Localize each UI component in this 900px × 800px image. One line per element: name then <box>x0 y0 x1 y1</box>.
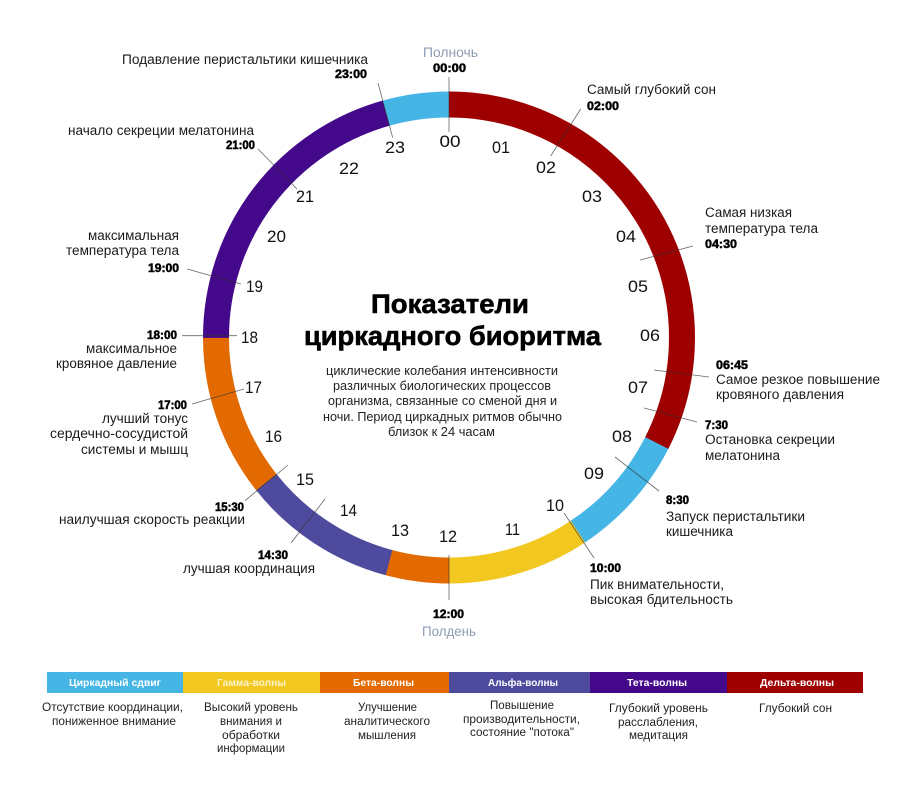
callout: noon: 12:00 <box>433 609 464 621</box>
callout: 23:00 <box>122 52 393 138</box>
legend: beta waves: мышления <box>358 730 416 742</box>
hour numbers: 08 <box>612 427 632 446</box>
legend: gamma waves: внимания и <box>220 716 282 728</box>
legend: theta waves: Тета-волны <box>627 677 687 689</box>
callout: 21:00 <box>68 123 297 189</box>
callout: 04:30: температура тела <box>705 221 818 236</box>
callout: 7:30: 7:30 <box>705 420 728 432</box>
hour numbers: 15 <box>296 470 314 489</box>
callout: 18:00: 18:00 <box>147 330 177 342</box>
callout: 18:00: кровяное давление <box>56 356 177 371</box>
callout: 8:30: Запуск перистальтики <box>666 509 805 524</box>
callout: midnight: Полночь <box>423 45 478 60</box>
callout: midnight: 00:00 <box>433 63 466 75</box>
callout: 19:00 <box>66 228 241 284</box>
hour numbers: 18 <box>241 328 258 347</box>
callout: 02:00: 02:00 <box>587 101 619 113</box>
callout: 10:00 <box>564 513 733 607</box>
hour numbers: 05 <box>628 277 648 296</box>
callout: 04:30: Самая низкая <box>705 205 792 220</box>
callout: 17:00: лучший тонус <box>102 411 188 426</box>
description text <box>323 364 562 439</box>
legend: alpha waves: Повышение <box>490 700 554 712</box>
hour numbers: 10 <box>546 496 564 515</box>
ring: 24-hour biorhythm circle <box>122 10 776 665</box>
legend: delta waves <box>727 672 863 715</box>
legend: alpha waves <box>449 672 590 739</box>
callout: 10:00: высокая бдительность <box>590 592 733 607</box>
description text: организма, связанные со сменой дня и <box>328 394 557 408</box>
callout: 04:30: 04:30 <box>705 239 737 251</box>
legend: beta waves: аналитического <box>344 716 430 728</box>
legend: delta waves: Дельта-волны <box>760 677 834 689</box>
callout: 06:45: кровяного давления <box>716 387 844 402</box>
hour numbers: 06 <box>640 326 660 345</box>
legend: gamma waves: информации <box>217 743 285 755</box>
hour numbers: 12 <box>439 527 457 546</box>
hour numbers: 11 <box>505 520 520 539</box>
callout: 17:00 <box>50 389 244 457</box>
title: циркадного биоритма <box>304 321 602 351</box>
legend: theta waves <box>590 672 727 742</box>
hour numbers: 19 <box>246 277 263 296</box>
hour numbers: 23 <box>385 138 405 157</box>
callout: 15:30 <box>59 465 288 527</box>
legend: gamma waves: Высокий уровень <box>204 702 298 714</box>
hour numbers: 00 <box>440 132 460 151</box>
legend: gamma waves: Гамма-волны <box>217 677 286 689</box>
callout: 7:30 <box>644 408 835 463</box>
callout: 23:00: 23:00 <box>335 69 367 81</box>
callout: 06:45 <box>654 360 880 402</box>
callout: 19:00: 19:00 <box>148 263 179 275</box>
legend: circadian shift: Отсутствие координации, <box>42 702 183 714</box>
legend: circadian shift: Циркадный сдвиг <box>69 677 162 689</box>
callout: noon: Полдень <box>422 624 476 639</box>
callout: 23:00: Подавление перистальтики кишечника <box>122 52 368 67</box>
callout: 17:00: сердечно-сосудистой <box>50 426 188 441</box>
description text: циклические колебания интенсивности <box>326 364 558 378</box>
hour numbers: 04 <box>616 227 636 246</box>
callout: noon <box>422 555 476 639</box>
hour numbers <box>241 132 660 546</box>
hour numbers: 03 <box>582 187 602 206</box>
legend: gamma waves: обработки <box>222 730 280 742</box>
callout: 02:00 <box>551 82 716 156</box>
callout: 14:30: лучшая координация <box>183 561 315 576</box>
hour numbers: 17 <box>245 378 262 397</box>
legend: circadian shift: пониженное внимание <box>52 716 176 728</box>
hour numbers: 02 <box>536 158 556 177</box>
hour numbers: 21 <box>296 187 314 206</box>
callout: 14:30: 14:30 <box>258 550 288 562</box>
legend bar <box>42 672 863 755</box>
callout: 02:00: Самый глубокий сон <box>587 82 716 97</box>
legend: theta waves: медитация <box>629 730 688 742</box>
callout: 7:30: мелатонина <box>705 448 780 463</box>
hour numbers: 09 <box>584 464 604 483</box>
callout: 21:00: 21:00 <box>226 140 255 152</box>
callout: 17:00: 17:00 <box>158 400 187 412</box>
callout: 18:00 <box>56 330 237 371</box>
callout: 15:30: 15:30 <box>215 502 244 514</box>
title <box>304 289 602 351</box>
callout: 06:45: 06:45 <box>716 360 749 372</box>
legend: alpha waves: состояние "потока" <box>470 727 574 739</box>
description text: ночи. Период циркадных ритмов обычно <box>323 410 562 424</box>
callout: 17:00: системы и мышц <box>81 442 188 457</box>
callout: 8:30: кишечника <box>666 524 733 539</box>
callout: 19:00: максимальная <box>88 228 179 243</box>
hour numbers: 20 <box>267 227 286 246</box>
callout: 19:00: температура тела <box>66 243 179 258</box>
hour numbers: 13 <box>391 521 409 540</box>
description text: близок к 24 часам <box>388 425 495 439</box>
legend: theta waves: расслабления, <box>618 717 698 729</box>
callout: 8:30: 8:30 <box>666 495 689 507</box>
title: Показатели <box>371 289 529 319</box>
callout: 10:00: Пик внимательности, <box>590 577 724 592</box>
callout: 15:30: наилучшая скорость реакции <box>59 512 245 527</box>
hour numbers: 14 <box>340 501 357 520</box>
callout: 14:30 <box>183 499 325 576</box>
legend: delta waves: Глубокий сон <box>759 703 832 715</box>
legend: alpha waves: Альфа-волны <box>488 677 558 689</box>
legend: theta waves: Глубокий уровень <box>609 703 708 715</box>
legend: beta waves: Улучшение <box>358 702 417 714</box>
legend: beta waves: Бета-волны <box>353 677 414 689</box>
callout: 7:30: Остановка секреции <box>705 432 835 447</box>
callout: 21:00: начало секреции мелатонина <box>68 123 254 138</box>
description text: различных биологических процессов <box>333 379 551 393</box>
callout: 18:00: максимальное <box>86 341 177 356</box>
hour numbers: 01 <box>492 138 510 157</box>
callout: 8:30 <box>615 457 805 539</box>
callout: 06:45: Самое резкое повышение <box>716 372 880 387</box>
legend: beta waves <box>320 672 449 742</box>
hour numbers: 07 <box>628 378 648 397</box>
legend: circadian shift <box>42 672 183 728</box>
legend: gamma waves <box>183 672 320 755</box>
hour numbers: 22 <box>339 159 359 178</box>
hour numbers: 16 <box>265 427 282 446</box>
callout: 10:00: 10:00 <box>590 563 621 575</box>
legend: alpha waves: производительности, <box>463 714 580 726</box>
callout: midnight <box>423 45 478 132</box>
callout: 04:30 <box>640 205 818 260</box>
